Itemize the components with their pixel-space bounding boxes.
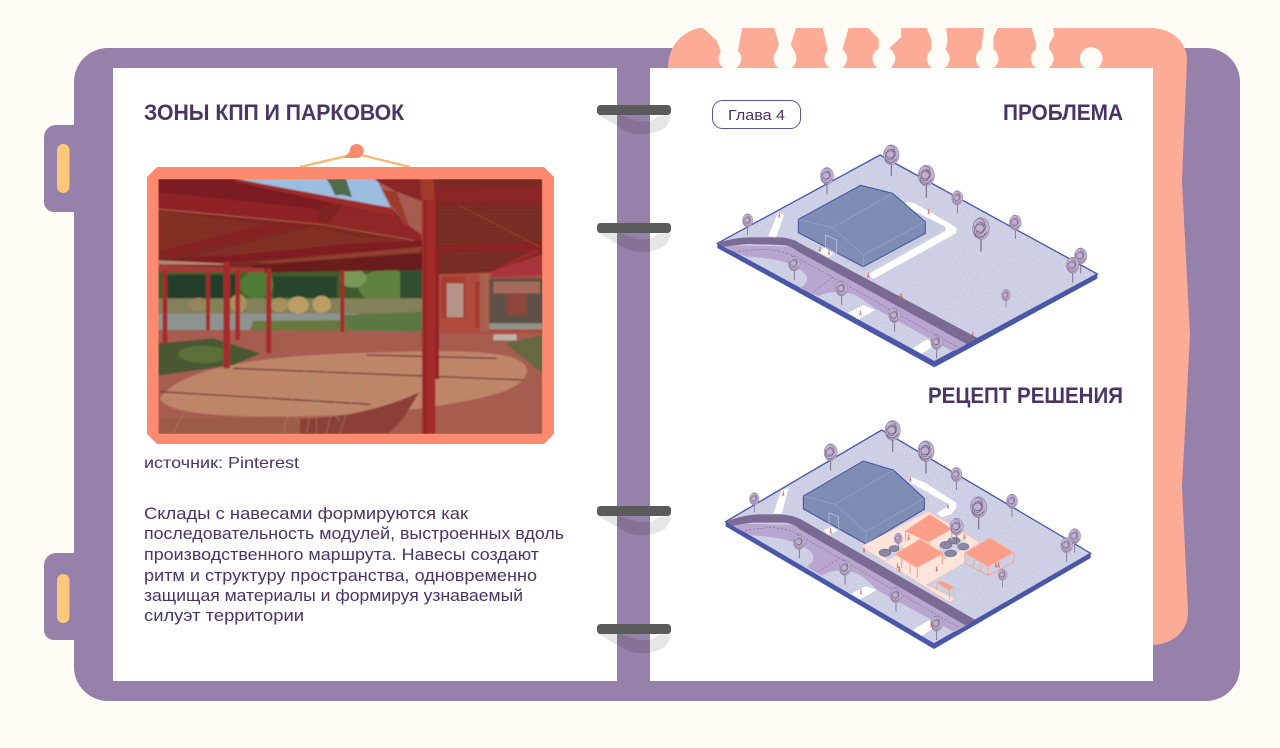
text block: description — [144, 504, 564, 625]
people — [782, 477, 1000, 627]
panel: left page — [113, 68, 617, 681]
right roof — [375, 179, 542, 274]
text block: description: последовательность модулей, выстроенных вдоль — [144, 524, 564, 543]
panel: right page — [650, 68, 1153, 681]
shrub beds — [878, 537, 970, 560]
photo caption: источник: Pinterest — [144, 455, 300, 472]
heading: left page title: ЗОНЫ КПП И ПАРКОВОК — [144, 100, 405, 125]
text block: description: силуэт территории — [144, 606, 304, 625]
photo frame — [147, 167, 554, 444]
canopy B — [895, 539, 943, 578]
heading: solution recipe: РЕЦЕПТ РЕШЕНИЯ — [928, 383, 1123, 408]
ring 4 — [597, 624, 671, 653]
chapter badge — [712, 100, 800, 128]
ring 2 — [597, 223, 671, 252]
distant greenery — [158, 270, 401, 300]
road and walkways — [717, 193, 978, 354]
warehouse — [798, 185, 925, 267]
text block: description: защищая материалы и формируя узнаваемый — [144, 586, 523, 605]
left roof — [158, 179, 423, 272]
isometric diagram: solution site — [726, 420, 1091, 649]
people — [778, 209, 974, 337]
binder rings — [597, 105, 671, 653]
canopy A — [905, 514, 952, 553]
ring 3 — [597, 506, 671, 535]
site plate — [726, 430, 1091, 649]
road and walkways — [726, 477, 976, 636]
icon: hanging pin and strings — [300, 144, 410, 167]
salmon back page with torn holes — [668, 25, 1190, 645]
small shelter — [937, 581, 953, 600]
pink plaza — [861, 511, 980, 602]
tab: lower left — [44, 553, 74, 640]
trees — [749, 420, 1081, 640]
heading: problem: ПРОБЛЕМА — [1003, 100, 1123, 125]
text block: description: производственного маршрута. Навесы создают — [144, 545, 539, 564]
columns — [223, 262, 230, 368]
text block: description: ритм и структуру пространства, одновременно — [144, 566, 537, 585]
canopy modules — [895, 514, 1014, 600]
chapter badge: Глава 4 — [728, 107, 785, 124]
text block: description: Склады с навесами формируются как — [144, 504, 469, 523]
photo: red canopy courtyard — [158, 179, 543, 434]
grass wisps — [173, 370, 366, 434]
tab: upper left — [44, 125, 74, 212]
canopy C — [965, 538, 1014, 576]
shrubs — [879, 537, 969, 557]
trees — [742, 145, 1087, 358]
ring 1 — [597, 105, 671, 134]
isometric diagram: problem site — [717, 145, 1097, 367]
right building — [438, 270, 543, 333]
paved ground — [324, 330, 422, 339]
site plate — [717, 155, 1097, 367]
warehouse — [803, 461, 924, 544]
left frame beam — [158, 260, 223, 265]
